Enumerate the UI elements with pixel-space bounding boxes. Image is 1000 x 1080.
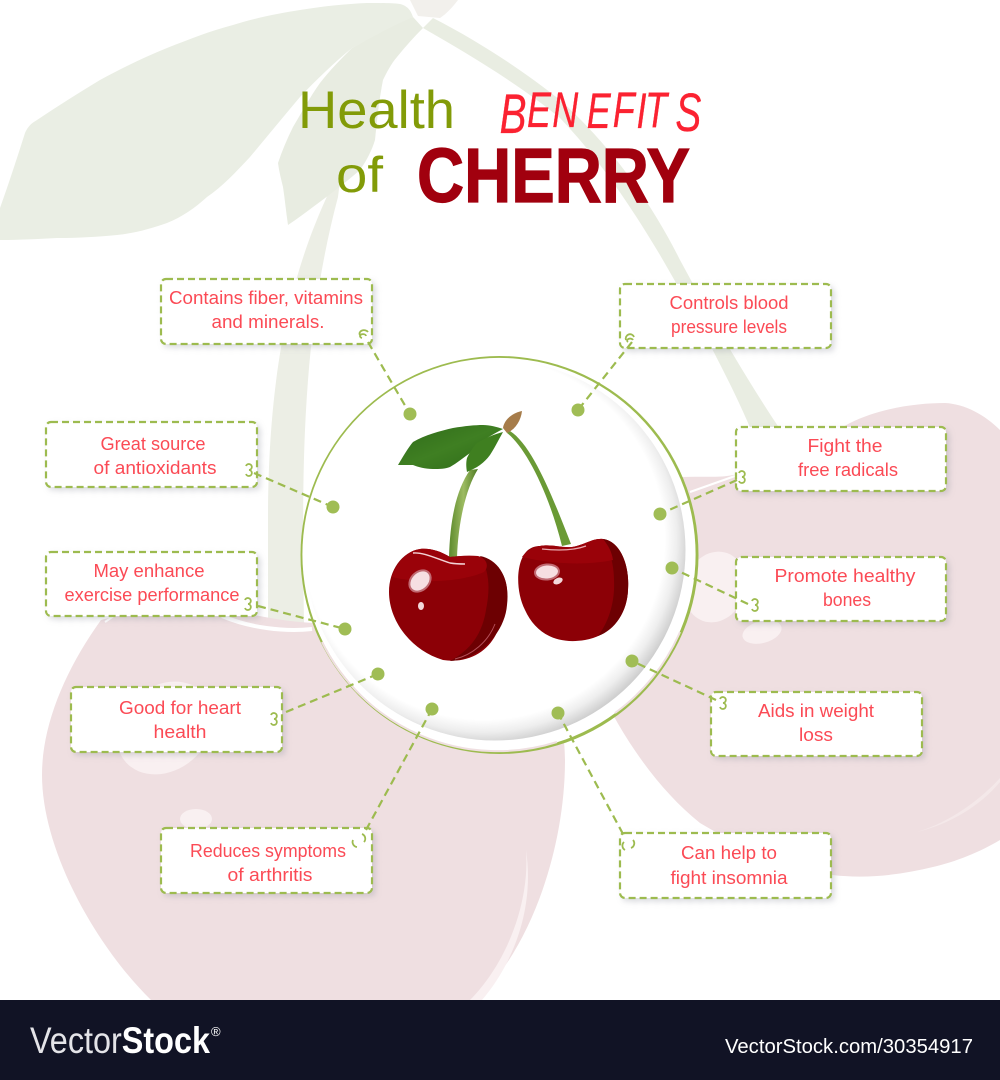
box: blood pressure xyxy=(620,284,831,348)
box: heart: health xyxy=(154,722,206,742)
heading: Health: Health xyxy=(298,81,455,140)
pale left cherry xyxy=(42,609,565,1000)
white ring area xyxy=(302,358,696,751)
pale left stem xyxy=(268,165,342,624)
box: weight: Aids in weight xyxy=(758,701,874,721)
footer bar xyxy=(0,1000,1000,1080)
left cherry top sheen xyxy=(392,549,487,581)
left highlight xyxy=(405,566,435,596)
right small highlight xyxy=(552,576,564,586)
right cherry rim shine xyxy=(542,546,586,550)
heading: Cherry: CHERRY xyxy=(417,133,690,219)
pale right cherry white streak xyxy=(690,476,735,492)
pale right cherry xyxy=(610,403,1000,877)
title xyxy=(298,81,701,219)
box: bones: bones xyxy=(823,590,871,610)
box: free radicals xyxy=(736,427,946,491)
box: insomnia: fight insomnia xyxy=(670,868,789,888)
inner disc xyxy=(304,360,686,740)
url: VectorStock.com/30354917 xyxy=(725,1036,973,1058)
box: arthritis xyxy=(161,828,372,893)
right cherry shade xyxy=(598,539,628,636)
heading: Benefits: ENEFIT xyxy=(527,83,670,139)
central circle xyxy=(300,356,698,754)
registered mark: ® xyxy=(211,1024,221,1039)
right stem xyxy=(507,431,571,546)
box: heart: Good for heart xyxy=(119,698,241,718)
heading: Benefits: S xyxy=(675,82,701,142)
circle outline xyxy=(300,356,698,754)
icon: cherry illustration xyxy=(389,411,628,661)
box: bones: Promote healthy xyxy=(774,566,916,586)
right cherry top sheen xyxy=(522,539,613,563)
large leaf xyxy=(398,425,503,469)
pale left cherry highlights xyxy=(98,662,528,1000)
right highlight xyxy=(534,563,560,581)
heading: of: of xyxy=(336,147,383,203)
box: antioxidants xyxy=(46,422,257,487)
box: arthritis: Reduces symptoms xyxy=(190,841,346,861)
box: fiber xyxy=(161,279,372,344)
box: weight: loss xyxy=(799,725,833,745)
box: insomnia: Can help to xyxy=(681,843,777,863)
connector dots xyxy=(326,404,678,720)
right cherry xyxy=(518,539,628,641)
pale small leaf xyxy=(278,17,423,225)
box: exercise: May enhance xyxy=(94,561,204,581)
small leaf xyxy=(466,432,503,472)
box: antioxidants: of antioxidants xyxy=(94,458,216,478)
box: free radicals: free radicals xyxy=(798,460,898,480)
box: insomnia xyxy=(620,833,831,898)
box: bones xyxy=(736,557,946,621)
box: exercise: exercise performance xyxy=(64,585,240,605)
connector swirls xyxy=(245,330,758,850)
box: fiber: Contains fiber, vitamins xyxy=(169,288,363,308)
pale large leaf xyxy=(0,3,413,240)
pink rim slivers xyxy=(322,632,680,751)
box: blood pressure: Controls blood xyxy=(670,293,788,313)
logo: VectorStock xyxy=(30,1020,210,1061)
box: heart xyxy=(71,687,282,752)
box: antioxidants: Great source xyxy=(100,434,206,454)
left cherry rim shine xyxy=(413,553,465,564)
connector lines xyxy=(254,342,748,834)
pale left cherry white sheen xyxy=(105,613,312,630)
pale right stem xyxy=(423,18,782,432)
heading: Benefits: B xyxy=(500,84,527,146)
left small highlight xyxy=(418,602,424,610)
box: exercise xyxy=(46,552,257,616)
bud xyxy=(503,411,522,433)
pale right cherry highlights xyxy=(674,543,1000,832)
box: free radicals: Fight the xyxy=(808,436,882,456)
box: fiber: and minerals. xyxy=(212,312,324,332)
box: weight xyxy=(711,692,922,756)
left cherry lower shine xyxy=(455,624,495,659)
box: arthritis: of arthritis xyxy=(228,865,312,885)
left stem xyxy=(449,469,478,558)
box: blood pressure: pressure levels xyxy=(671,317,787,337)
left cherry xyxy=(389,549,507,661)
pale bud xyxy=(410,0,458,18)
left cherry shade xyxy=(450,556,508,661)
